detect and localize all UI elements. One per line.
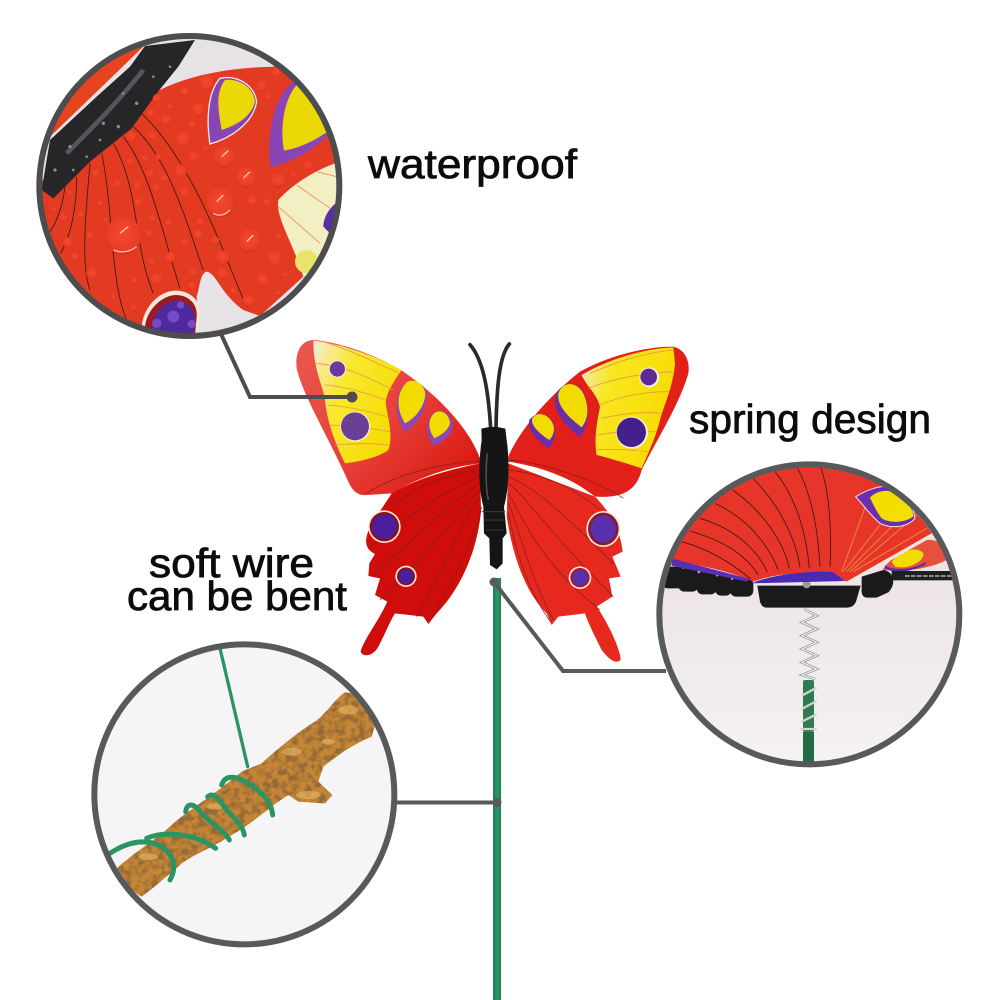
bottom eye spot [142,290,200,333]
circle border [94,644,394,944]
label: spring design: spring design [689,396,931,442]
purple and yellow teardrops [208,78,257,144]
circle border [659,464,959,764]
eye spots, top left [329,360,370,442]
top left wing [296,340,480,495]
label: soft wire: soft wire [149,540,314,586]
bark highlights [138,705,358,860]
antennae [470,344,509,428]
circle: spring close-up [650,455,970,775]
spring [802,609,817,679]
red wing fan [672,463,932,582]
leader line: soft wire [396,800,500,805]
green wire [803,732,814,765]
leader line: spring design [492,580,666,671]
green wire wrap [110,648,273,880]
black wing mount [42,40,195,198]
wing vein lines [50,113,247,318]
black mount with beads [663,567,893,608]
bottom left wing [361,463,481,655]
cream panel [278,162,340,277]
red wing surface [42,66,335,326]
circle: soft wire on twig close-up [85,635,405,955]
droplets on purple spot [152,301,196,328]
top right wing [508,347,689,497]
teardrops left [397,381,453,446]
circle border [39,36,339,336]
body [479,427,509,569]
yellow panel right [582,347,675,468]
wing veins [682,468,831,579]
eye spots, bottom left [368,510,417,587]
water droplets [51,66,313,311]
twig [117,692,375,897]
bottom right wing [507,463,623,662]
teardrops right [529,384,588,448]
circle: waterproof close-up [30,30,350,350]
eye spots, bottom right [569,511,620,589]
stick arm [892,571,955,580]
wire stake [493,578,501,1000]
teardrop on wing [856,486,915,527]
leader line: waterproof [221,334,356,400]
butterfly [296,340,689,662]
wing veins [315,342,673,452]
purple wing edge [672,558,750,582]
label: can be bent: can be bent [127,573,348,619]
upper wing [51,46,144,136]
droplet highlights [113,151,253,252]
yellow panel left [313,341,402,463]
label: waterproof: waterproof [367,141,578,187]
rear wing [883,540,947,571]
eye spots, top right [616,367,659,449]
